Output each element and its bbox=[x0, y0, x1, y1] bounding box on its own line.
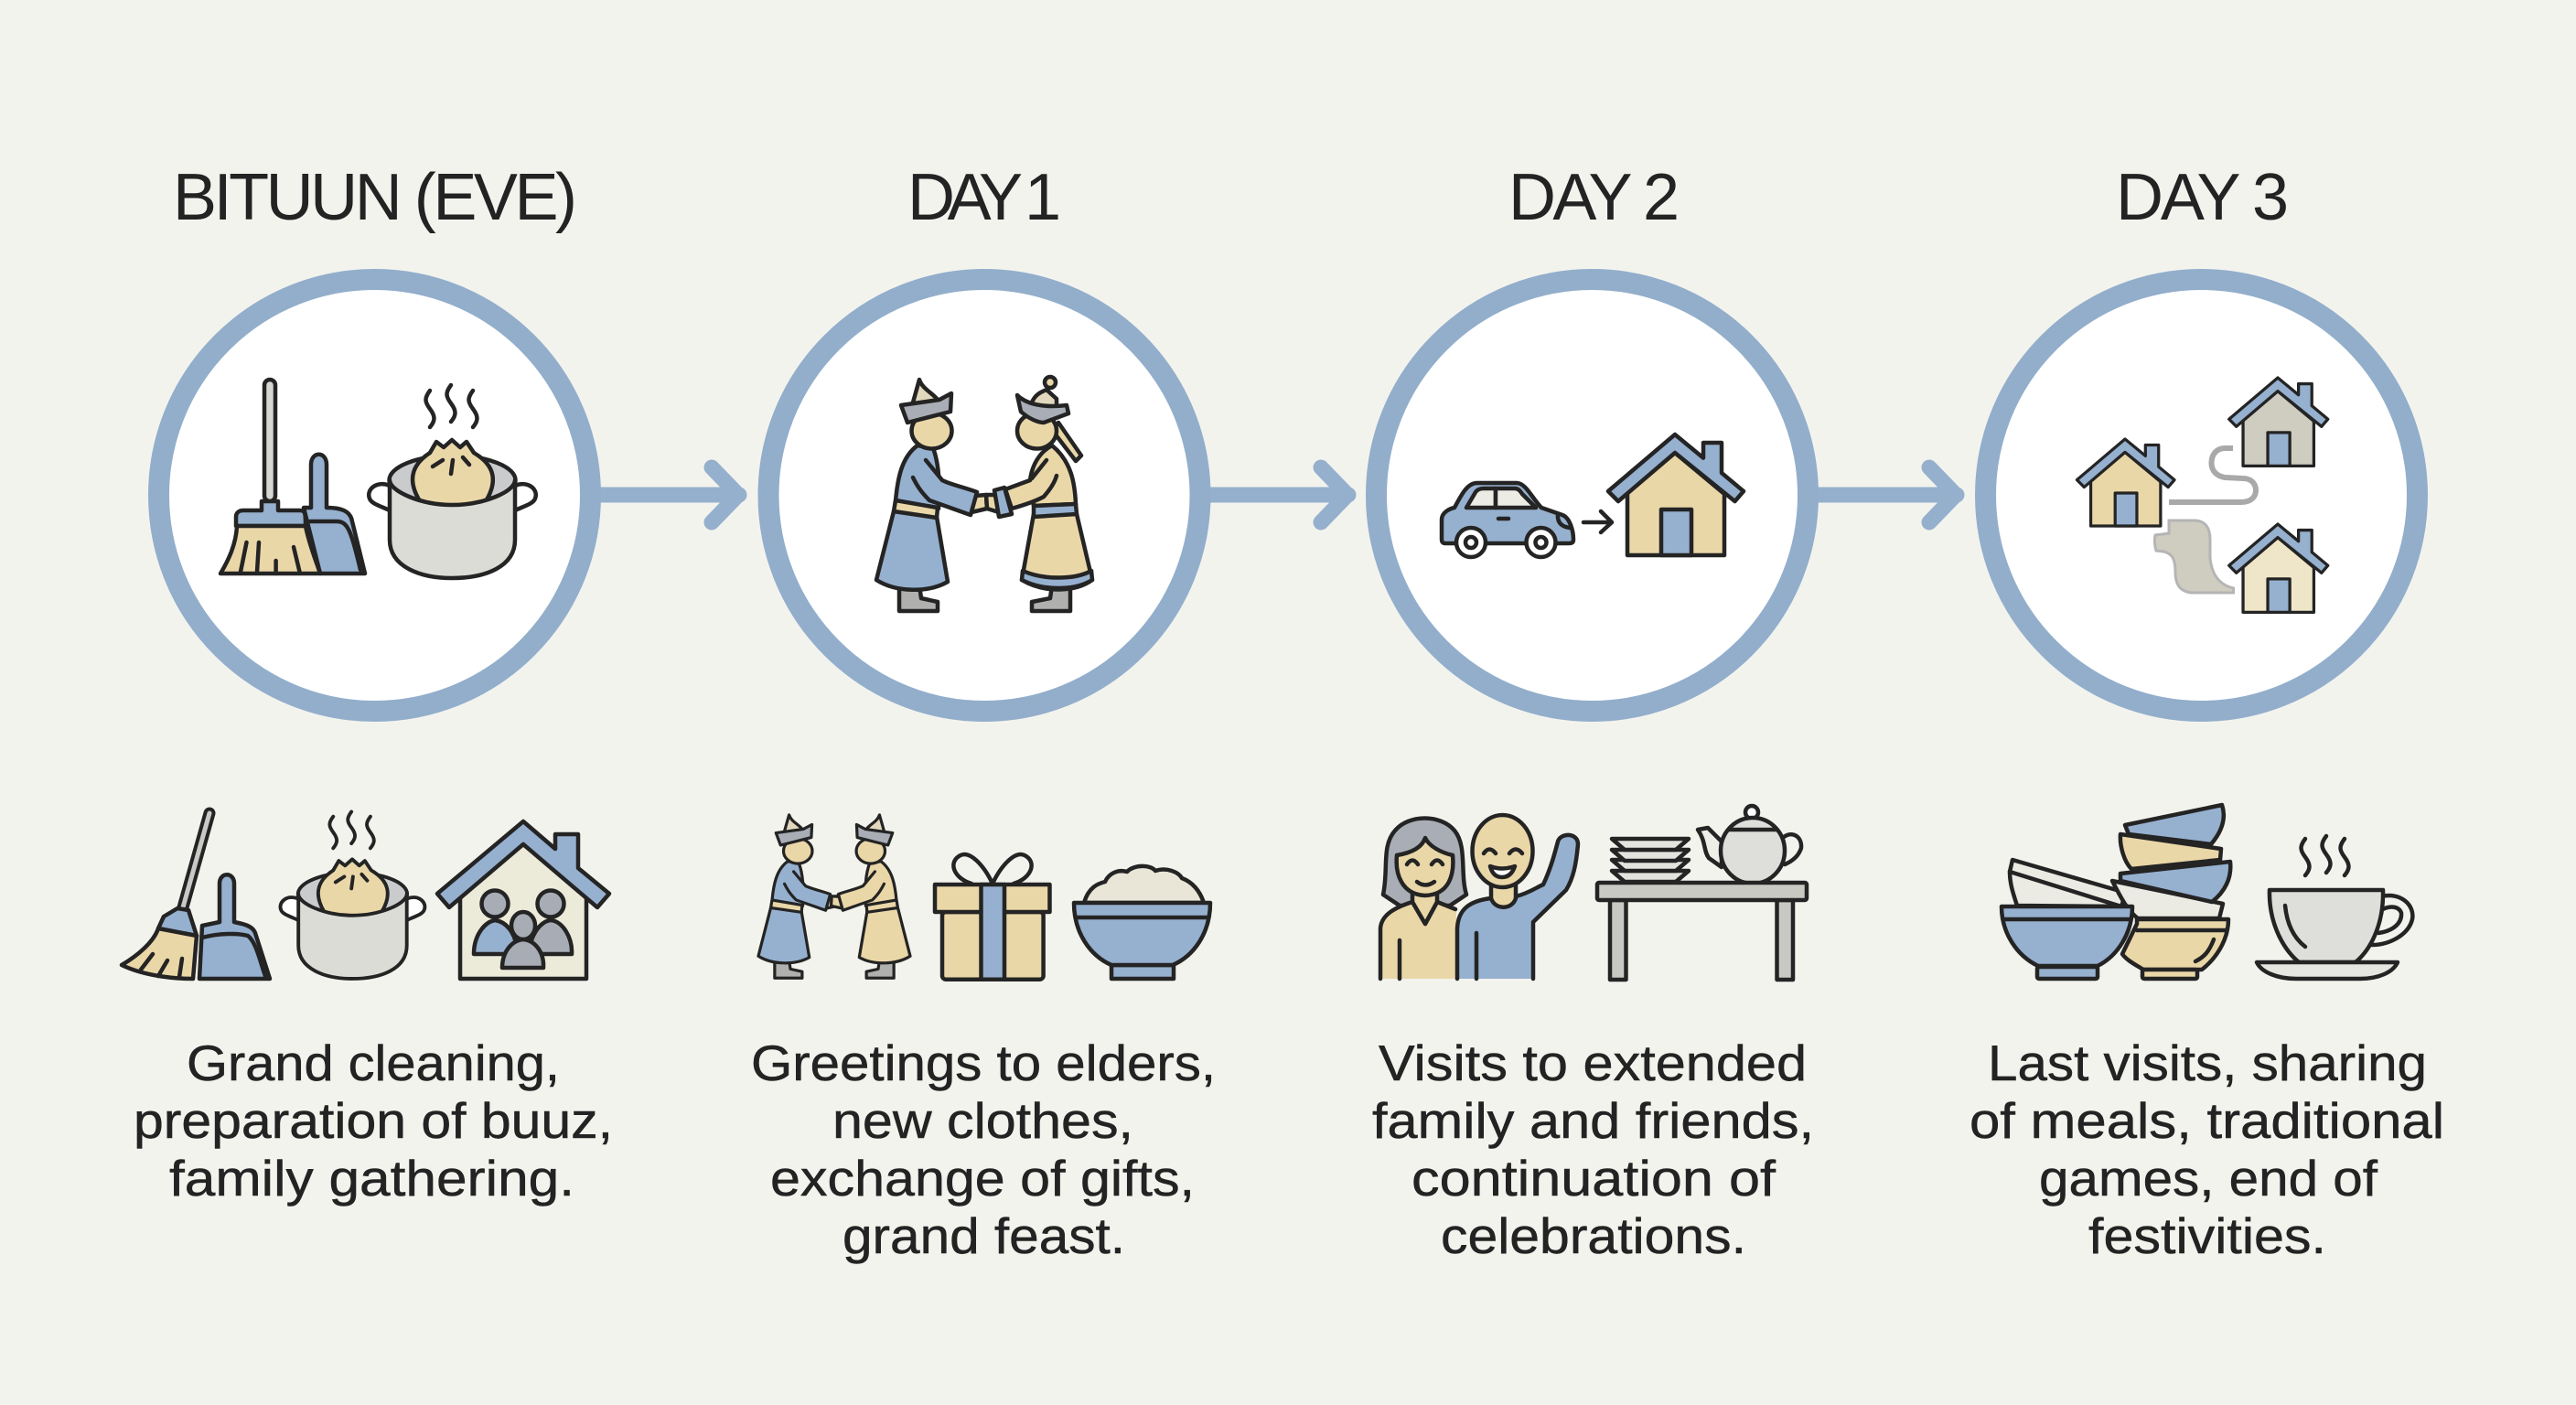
description: Bituun: family gathering. bbox=[169, 1150, 574, 1207]
icon: two people greeting bbox=[758, 815, 910, 978]
description: Day 2: continuation of bbox=[1411, 1150, 1776, 1207]
circle: Day 2 bbox=[1376, 280, 1808, 712]
figure: man waving bbox=[1457, 815, 1578, 979]
figure: right person bbox=[986, 377, 1092, 611]
icon: stacked bowls bbox=[2002, 805, 2230, 979]
description: Day 1: new clothes, bbox=[832, 1092, 1133, 1149]
description: Bituun: preparation of buuz, bbox=[134, 1092, 613, 1149]
description: Day 2: Visits to extended bbox=[1379, 1035, 1807, 1091]
arrow: day 2 to day 3 bbox=[1819, 467, 1957, 522]
heading: Day 1: DAY 1 bbox=[907, 161, 1061, 234]
icon: broom and dustpan in circle bbox=[220, 380, 365, 574]
description: Day 1 bbox=[751, 1035, 1216, 1264]
figure: small left person bbox=[758, 815, 837, 978]
icon: house left bbox=[2077, 439, 2174, 526]
panel: Day 1 bbox=[751, 161, 1216, 1264]
description: Day 2 bbox=[1372, 1035, 1814, 1264]
arrow: eve to day 1 bbox=[601, 467, 739, 522]
icon: table with plates and teapot bbox=[1597, 806, 1807, 980]
panel: Bituun (Eve) bbox=[122, 161, 613, 1207]
panel: Day 2 bbox=[1372, 161, 1814, 1264]
description: Day 1: Greetings to elders, bbox=[751, 1035, 1216, 1091]
icon: house top right bbox=[2229, 378, 2328, 466]
icon: winding road between houses bbox=[2154, 520, 2234, 593]
description: Day 3: Last visits, sharing bbox=[1988, 1035, 2427, 1091]
description: Day 1: exchange of gifts, bbox=[770, 1150, 1195, 1207]
description: Day 3: games, end of bbox=[2039, 1150, 2378, 1207]
description: Day 2: family and friends, bbox=[1372, 1092, 1814, 1149]
arrow: day 1 to day 2 bbox=[1210, 467, 1348, 522]
icon: car bbox=[1442, 483, 1573, 557]
icon: broom and dustpan bbox=[122, 813, 270, 979]
heading: Day 2: DAY 2 bbox=[1508, 161, 1680, 234]
heading: Day 3: DAY 3 bbox=[2116, 161, 2289, 234]
figure: woman bbox=[1380, 818, 1466, 979]
icon: pot with buuz in circle bbox=[369, 385, 536, 578]
icon: pot with buuz bbox=[280, 811, 424, 979]
heading: Bituun (Eve): BITUUN (EVE) bbox=[173, 161, 577, 234]
icon: gift box bbox=[935, 854, 1050, 980]
icon: small arrow bbox=[1583, 511, 1612, 532]
circle: Bituun bbox=[159, 280, 591, 712]
description: Day 3: festivities. bbox=[2088, 1207, 2326, 1264]
icon: house bbox=[1608, 434, 1744, 555]
description: Day 3 bbox=[1970, 1035, 2444, 1264]
circle: Day 1 bbox=[768, 280, 1200, 712]
description: Day 1: grand feast. bbox=[843, 1207, 1125, 1264]
description: Day 2: celebrations. bbox=[1441, 1207, 1746, 1264]
circle: Day 3 bbox=[1985, 280, 2417, 712]
icon: smiling couple bbox=[1380, 815, 1578, 979]
description: Bituun bbox=[134, 1035, 613, 1207]
description: Day 3: of meals, traditional bbox=[1970, 1092, 2444, 1149]
icon: two people greeting in circle bbox=[876, 377, 1092, 611]
icon: house bottom right bbox=[2229, 524, 2328, 612]
icon: path between houses bbox=[2169, 448, 2256, 502]
icon: rice bowl bbox=[1074, 866, 1210, 979]
description: Bituun: Grand cleaning, bbox=[187, 1035, 560, 1091]
icon: steaming cup bbox=[2257, 836, 2412, 979]
panel: Day 3 bbox=[1970, 161, 2444, 1264]
icon: house with family bbox=[437, 821, 609, 979]
figure: left person bbox=[876, 380, 987, 611]
figure: small right person bbox=[832, 815, 910, 978]
